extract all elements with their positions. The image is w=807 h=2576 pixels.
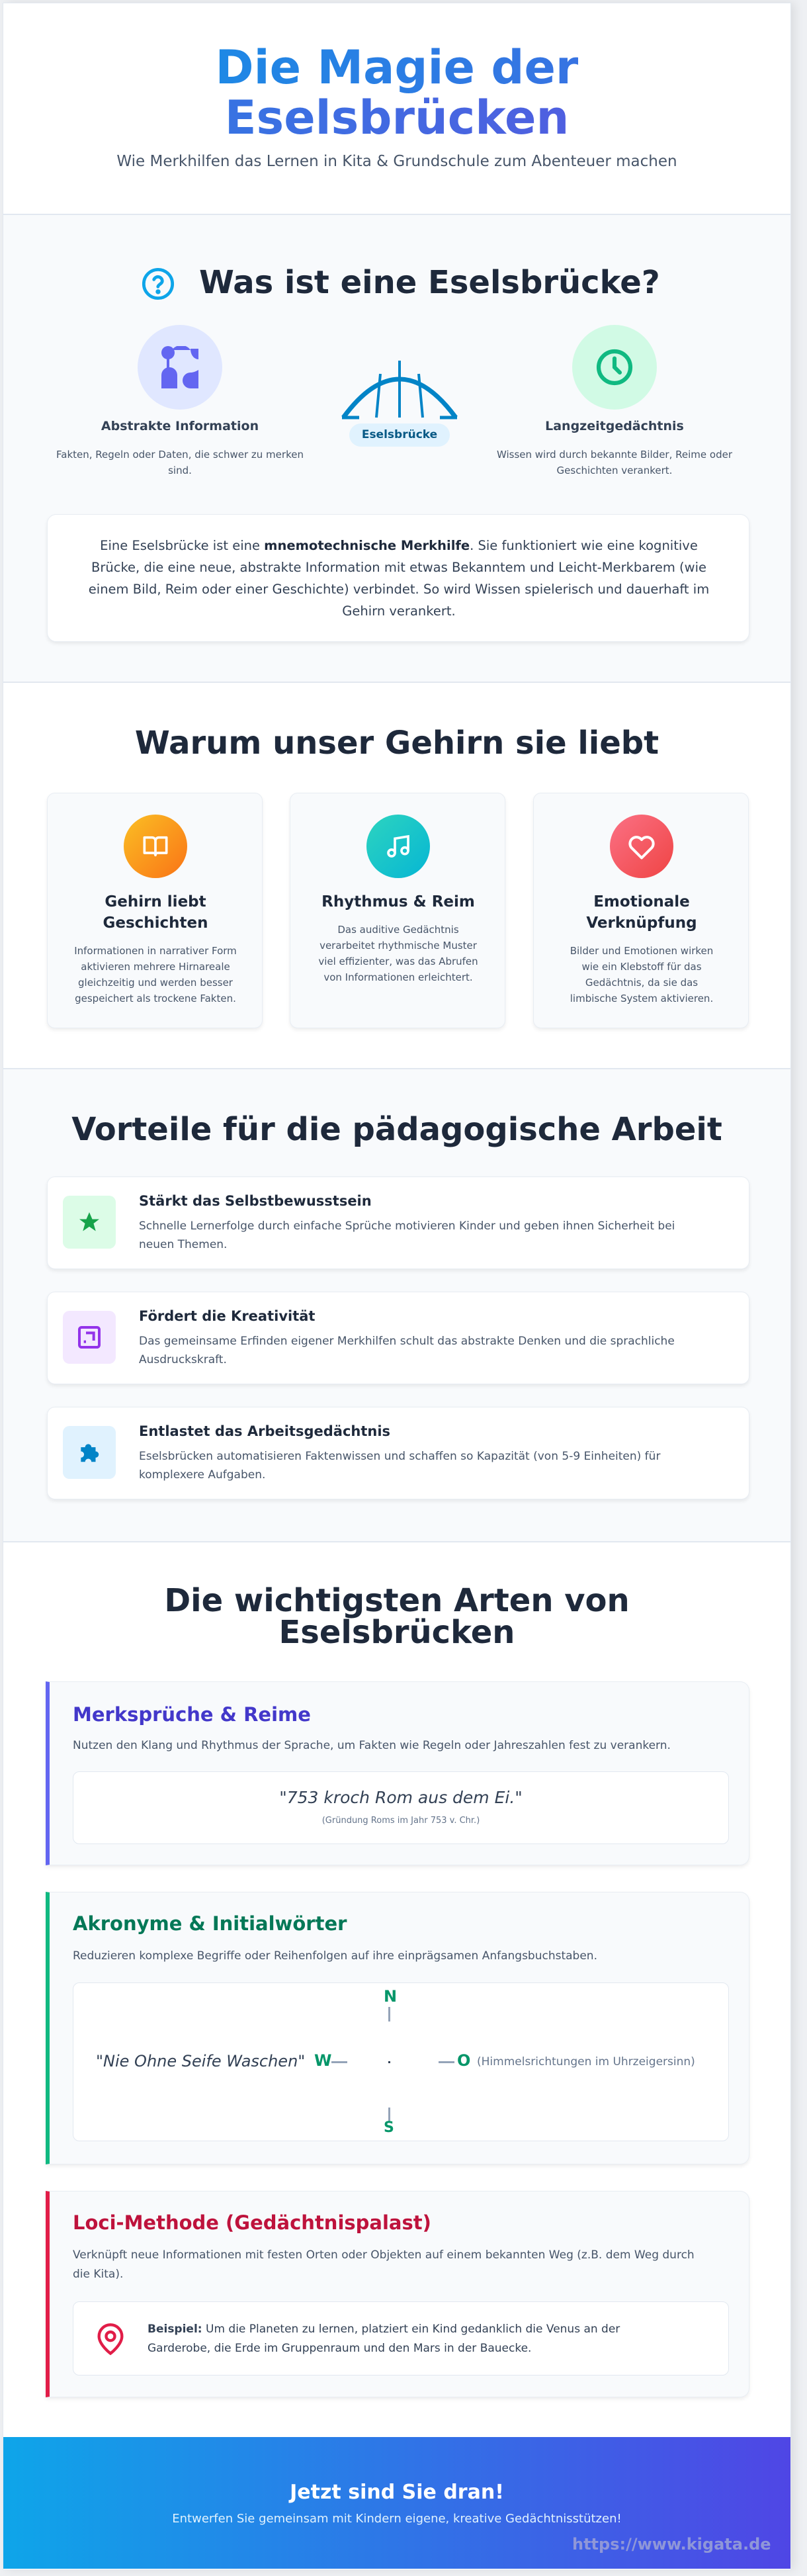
card: loci — [46, 2191, 749, 2397]
example box: Beispiel: Um die Planeten zu lernen, platziert ein Kind gedanklich die Venus an der Garderobe, die Erde im Gruppenraum und den Mars in der Bauecke. — [148, 2323, 620, 2355]
icon: heart — [610, 815, 673, 878]
column: langzeitgedächtnis — [497, 325, 733, 476]
card: kreativität: Das gemeinsame Erfinden eigener Merkhilfen schult das abstrakte Denken und die sprachliche Ausdruckskraft. — [139, 1335, 675, 1366]
icon: question — [142, 268, 175, 300]
icon: creative square — [63, 1311, 116, 1364]
icon: star — [63, 1196, 116, 1249]
text block: definition: Eine Eselsbrücke ist eine mnemotechnische Merkhilfe. Sie funktioniert wie eine kognitive Brücke, die eine neue, abstrakte Information mit etwas Bekanntem und Leicht-Merkbarem (wie einem Bild, Reim oder einer Geschichte) verbindet. So wird Wissen spielerisch und dauerhaft im Gehirn verankert. — [89, 538, 709, 619]
card: emotionale verknüpfung: Bilder und Emotionen wirken wie ein Klebstoff für das Gedächtnis, da sie das limbische System aktivieren. — [570, 945, 713, 1004]
card: akronyme: Akronyme & Initialwörter — [73, 1912, 347, 1935]
card: arbeitsgedächtnis: Eselsbrücken automatisieren Faktenwissen und schaffen so Kapazität (von 5-9 Einheiten) für komplexere Aufgaben. — [139, 1450, 660, 1482]
panel: vorteile — [3, 1069, 790, 1542]
example box: "753 kroch Rom aus dem Ei." — [279, 1788, 523, 1807]
compass example: "Nie Ohne Seife Waschen" — [96, 2052, 305, 2070]
panel: was ist eine eselsbrücke — [3, 215, 790, 683]
card: geschichten: Geschichten — [103, 914, 208, 932]
title: Eselsbrücken — [225, 91, 569, 145]
icon: book — [124, 815, 187, 878]
heading: Eselsbrücken — [279, 1614, 515, 1651]
card: loci: Verknüpft neue Informationen mit festen Orten oder Objekten auf einem bekannten Weg (z.B. dem Weg durch die Kita). — [73, 2248, 695, 2281]
heading: Was ist eine Eselsbrücke? — [199, 264, 660, 301]
card: merksprüche: Merksprüche & Reime — [73, 1703, 311, 1726]
card: rhythmus: Das auditive Gedächtnis verarbeitet rhythmische Muster viel effizienter, was das Abrufen von Informationen erleichtert. — [318, 924, 478, 983]
card: emotionale verknüpfung: Verknüpfung — [586, 914, 697, 932]
footer: Jetzt sind Sie dran! — [290, 2481, 504, 2504]
panel: arten — [3, 1542, 790, 2437]
card: emotionale verknüpfung — [533, 793, 749, 1028]
column: langzeitgedächtnis: Wissen wird durch bekannte Bilder, Reime oder Geschichten verankert. — [497, 449, 732, 476]
card: selbstbewusstsein — [47, 1177, 749, 1269]
header — [3, 3, 790, 215]
card: akronyme: Reduzieren komplexe Begriffe oder Reihenfolgen auf ihre einprägsamen Anfangsbuchstaben. — [73, 1949, 597, 1963]
compass example: W — [314, 2051, 331, 2070]
description: Fakten, Regeln oder Daten, die schwer zu merken sind. — [56, 449, 304, 476]
card: kreativität: Fördert die Kreativität — [139, 1308, 315, 1324]
footer: Entwerfen Sie gemeinsam mit Kindern eigene, kreative Gedächtnisstützen! — [172, 2512, 622, 2526]
title — [216, 40, 578, 145]
subtitle: Wie Merkhilfen das Lernen in Kita & Grundschule zum Abenteuer machen — [116, 153, 677, 170]
example box: (Gründung Roms im Jahr 753 v. Chr.) — [322, 1816, 480, 1826]
column: abstrakte information — [56, 325, 304, 476]
card: arbeitsgedächtnis: Entlastet das Arbeitsgedächtnis — [139, 1423, 390, 1439]
label: Abstrakte Information — [101, 419, 259, 433]
card: merksprüche — [46, 1681, 749, 1865]
compass example: N — [384, 1987, 397, 2006]
example box — [73, 1771, 729, 1844]
heading — [164, 1582, 630, 1651]
heading: Vorteile für die pädagogische Arbeit — [71, 1111, 722, 1148]
icon: music — [366, 815, 430, 878]
compass example: O — [457, 2051, 470, 2070]
title: Die Magie der — [216, 40, 578, 95]
badge — [349, 423, 450, 447]
icon: map pin — [98, 2323, 123, 2356]
card: merksprüche: Nutzen den Klang und Rhythmus der Sprache, um Fakten wie Regeln oder Jahreszahlen fest zu verankern. — [73, 1739, 671, 1752]
card: akronyme — [46, 1892, 749, 2164]
heading: Die wichtigsten Arten von — [164, 1582, 630, 1619]
compass example: (Himmelsrichtungen im Uhrzeigersinn) — [477, 2055, 695, 2068]
icon: abstract shapes — [138, 325, 222, 410]
card: rhythmus: Rhythmus & Reim — [321, 893, 475, 910]
card: kreativität — [47, 1292, 749, 1384]
card: selbstbewusstsein: Stärkt das Selbstbewusstsein — [139, 1193, 372, 1209]
footer — [3, 2437, 790, 2569]
card: geschichten — [47, 793, 263, 1028]
card: loci: Loci-Methode (Gedächtnispalast) — [73, 2211, 431, 2234]
url: https://www.kigata.de — [572, 2535, 771, 2554]
card: rhythmus — [290, 793, 505, 1028]
icon: puzzle — [63, 1426, 116, 1479]
card: geschichten: Informationen in narrativer Form aktivieren mehrere Hirnareale gleichzeitig und werden besser gespeichert als trockene Fakten. — [74, 945, 237, 1004]
text block: definition — [47, 514, 749, 642]
card: geschichten: Gehirn liebt — [105, 893, 206, 910]
compass example — [73, 1982, 729, 2141]
card: arbeitsgedächtnis — [47, 1407, 749, 1499]
icon: bridge — [341, 361, 458, 447]
card: emotionale verknüpfung: Emotionale — [593, 893, 690, 910]
panel: warum unser gehirn — [3, 683, 790, 1069]
card: selbstbewusstsein: Schnelle Lernerfolge durch einfache Sprüche motivieren Kinder und geben ihnen Sicherheit bei neuen Themen. — [139, 1220, 675, 1251]
heading: Warum unser Gehirn sie liebt — [135, 725, 659, 762]
example box — [73, 2301, 729, 2376]
column: langzeitgedächtnis: Langzeitgedächtnis — [545, 419, 684, 433]
badge: Eselsbrücke — [362, 428, 437, 441]
icon: clock — [572, 325, 657, 410]
compass example: S — [384, 2119, 394, 2136]
